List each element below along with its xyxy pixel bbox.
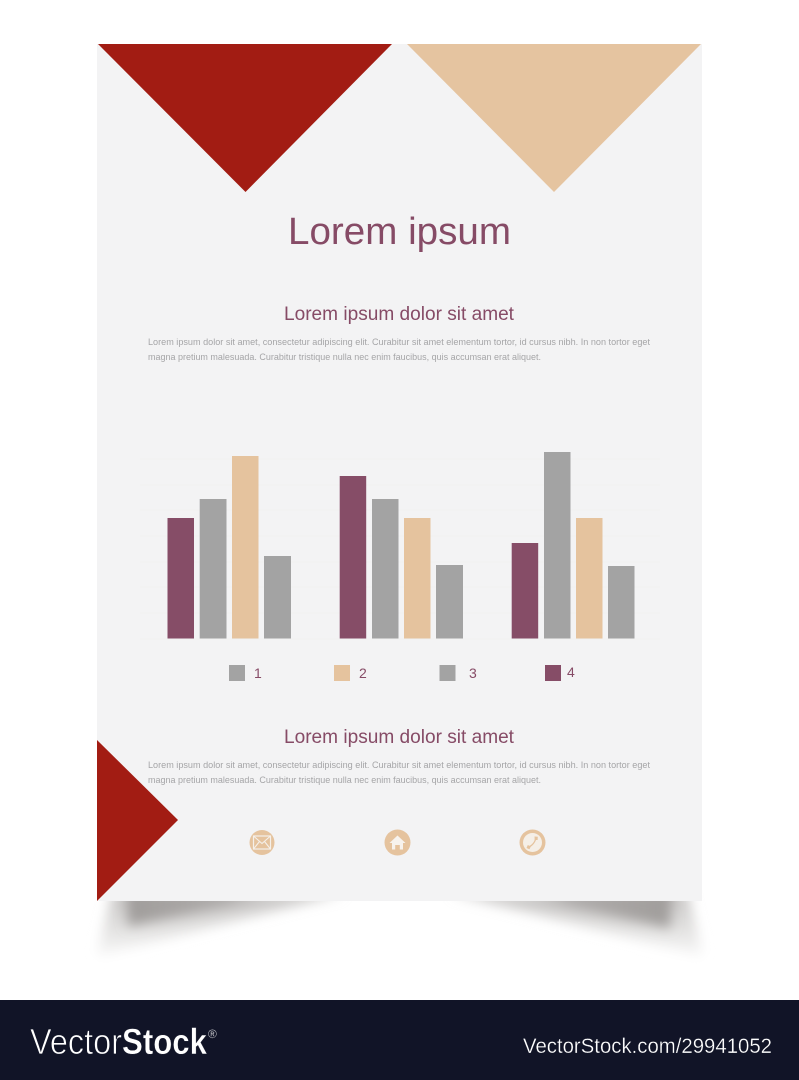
legend item 4: 4 (567, 664, 575, 680)
bottom subheading: Lorem ipsum dolor sit amet (284, 727, 515, 748)
left shadow, outer haze (97, 893, 345, 956)
bottom body text (148, 760, 650, 786)
VectorStock logo: Vector (30, 1021, 122, 1062)
watermark footer bar (0, 1000, 799, 1080)
title: Lorem ipsum (288, 211, 511, 253)
legend item 2 (334, 665, 367, 681)
bar group 3 (512, 452, 634, 638)
poster sheet (97, 44, 702, 901)
legend item 1: 1 (254, 665, 262, 681)
top body text: magna pretium malesuada. Curabitur tristique nulla nec enim faucibus, quis accumsan erat aliquet. (148, 352, 541, 363)
top subheading: Lorem ipsum dolor sit amet (284, 304, 515, 325)
top body text: Lorem ipsum dolor sit amet, consectetur adipiscing elit. Curabitur sit amet elementum tortor, id cursus nibh. In non tortor eget (148, 337, 650, 348)
legend item 3: 3 (469, 665, 477, 681)
top body text (148, 337, 650, 363)
icon: mail (250, 830, 274, 855)
right shadow, core (490, 890, 672, 928)
VectorStock logo: Stock (122, 1021, 208, 1062)
bottom body text: Lorem ipsum dolor sit amet, consectetur adipiscing elit. Curabitur sit amet elementum tortor, id cursus nibh. In non tortor eget (148, 760, 650, 771)
legend item 3 (440, 665, 477, 681)
red side triangle (97, 740, 178, 901)
image id: VectorStock.com/29941052 (523, 1035, 772, 1058)
legend item 4 (545, 664, 575, 681)
legend item 2: 2 (359, 665, 367, 681)
bottom body text: magna pretium malesuada. Curabitur tristique nulla nec enim faucibus, quis accumsan erat aliquet. (148, 775, 541, 786)
chart legend (229, 664, 575, 681)
bar chart (140, 452, 660, 639)
bar group 1 (168, 456, 291, 638)
VectorStock logo (30, 1021, 217, 1062)
red top triangle (98, 44, 392, 192)
icon: home (384, 830, 410, 856)
right shadow, outer haze (450, 893, 703, 956)
VectorStock logo: ® (208, 1027, 217, 1041)
bar group 2 (340, 476, 463, 638)
left shadow, core (126, 890, 310, 926)
tan top triangle (407, 44, 701, 192)
paper drop shadows (97, 890, 703, 956)
legend item 1 (229, 665, 262, 681)
icon: phone (520, 830, 546, 856)
